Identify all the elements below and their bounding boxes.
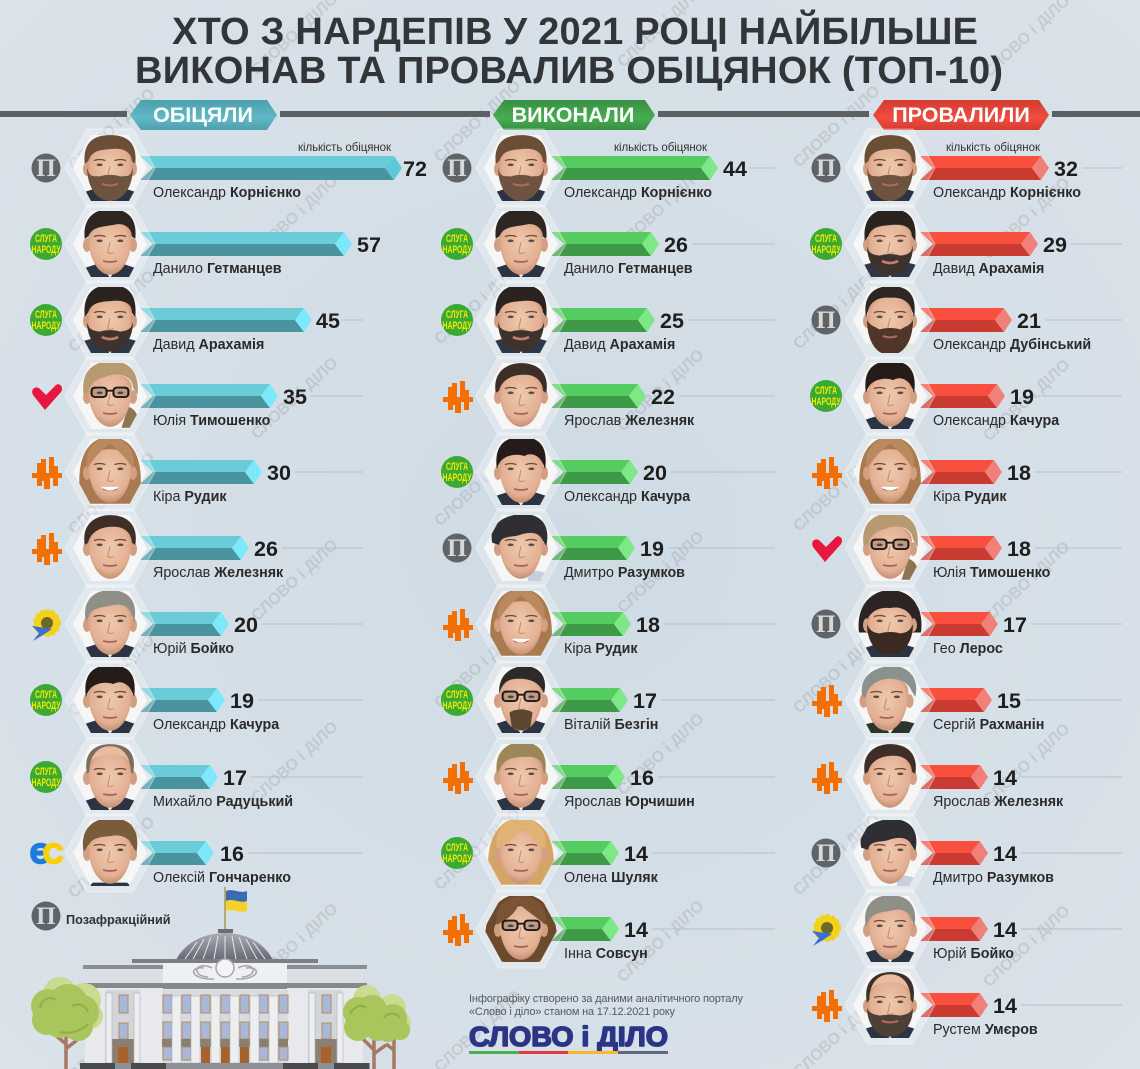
icon: Servant of the People xyxy=(30,761,62,793)
row: Разумков 14 xyxy=(812,814,1122,892)
icon: Holos xyxy=(443,762,473,794)
icon: Servant of the People: СЛУГА xyxy=(815,233,837,245)
icon: Servant of the People: НАРОДУ xyxy=(32,320,61,332)
icon: Servant of the People: НАРОДУ xyxy=(442,320,472,332)
icon: Batkivshchyna heart xyxy=(32,384,62,410)
portrait xyxy=(476,509,566,587)
icon: Servant of the People: НАРОДУ xyxy=(32,777,61,789)
bar 14 xyxy=(920,841,988,865)
portrait xyxy=(65,205,155,283)
icon: Servant of the People xyxy=(441,456,473,488)
row: Гетманцев 57 xyxy=(30,205,381,283)
name: Дмитро Разумков xyxy=(933,870,1054,886)
icon: Holos xyxy=(32,457,62,489)
row: Гончаренко 16 xyxy=(30,814,363,892)
row: Гетманцев 26 xyxy=(441,205,775,283)
icon: Holos xyxy=(812,990,842,1022)
portrait xyxy=(65,509,155,587)
icon: Batkivshchyna heart xyxy=(812,536,842,562)
portrait xyxy=(476,890,566,968)
value: 20 xyxy=(234,613,258,637)
value: 25 xyxy=(660,309,684,333)
name: Олександр Качура xyxy=(153,717,280,733)
title: ВИКОНАВ ТА ПРОВАЛИВ ОБІЦЯНОК (ТОП-10) xyxy=(135,50,1003,92)
name: Давид Арахамія xyxy=(933,261,1044,277)
value: 14 xyxy=(993,994,1017,1018)
watermark pattern: СЛОВО і ДІЛО xyxy=(614,711,707,799)
value: 44 xyxy=(723,157,747,181)
value: 32 xyxy=(1054,157,1078,181)
value: 16 xyxy=(220,842,244,866)
icon: Servant of the People: СЛУГА xyxy=(35,689,57,701)
watermark pattern: СЛОВО і ДІЛО xyxy=(248,901,341,989)
portrait xyxy=(476,661,566,739)
legend: independent deputy xyxy=(32,902,171,930)
portrait xyxy=(476,738,566,816)
row: Корнієнко 72 xyxy=(32,129,427,207)
icon: Servant of the People: СЛУГА xyxy=(35,309,57,321)
bar 29 xyxy=(920,232,1038,256)
bar 15 xyxy=(920,688,992,712)
watermark pattern: СЛОВО і ДІЛО xyxy=(980,357,1073,445)
watermark pattern: СЛОВО і ДІЛО xyxy=(980,175,1073,263)
watermark pattern: СЛОВО і ДІЛО xyxy=(431,806,524,894)
portrait xyxy=(65,814,155,892)
name: Олександр Качура xyxy=(564,489,691,505)
value: 18 xyxy=(1007,461,1031,485)
name: Олена Шуляк xyxy=(564,870,659,886)
value: 15 xyxy=(997,689,1021,713)
icon: independent: П xyxy=(816,840,836,867)
name: Давид Арахамія xyxy=(153,337,264,353)
portrait xyxy=(476,357,566,435)
icon: Servant of the People: НАРОДУ xyxy=(812,244,841,256)
name: Рустем Умєров xyxy=(933,1022,1038,1038)
watermark pattern: СЛОВО і ДІЛО xyxy=(65,814,158,902)
axis caption, column 2: кількість обіцянок xyxy=(614,142,708,154)
value: 20 xyxy=(643,461,667,485)
portrait xyxy=(845,509,935,587)
row: Умєров 14 xyxy=(812,966,1122,1044)
row: Лерос 17 xyxy=(812,585,1122,663)
portrait xyxy=(845,281,935,359)
watermark pattern: СЛОВО і ДІЛО xyxy=(980,721,1073,809)
icon: independent: П xyxy=(447,535,467,562)
bar 22 xyxy=(551,384,646,408)
watermark pattern: СЛОВО і ДІЛО xyxy=(980,539,1073,627)
value: 19 xyxy=(640,537,664,561)
portrait xyxy=(845,738,935,816)
icon: Servant of the People: НАРОДУ xyxy=(442,472,472,484)
name: Олександр Корнієнко xyxy=(153,185,301,201)
watermark pattern: СЛОВО і ДІЛО xyxy=(248,355,341,443)
row: Железняк 26 xyxy=(32,509,363,587)
bar 18 xyxy=(551,612,631,636)
row: Железняк 14 xyxy=(812,738,1122,816)
bar 30 xyxy=(140,460,262,484)
icon: independent: П xyxy=(36,155,56,182)
row: Качура 19 xyxy=(810,357,1122,435)
name: Кіра Рудик xyxy=(153,489,227,505)
bar 17 xyxy=(140,765,218,789)
row: Арахамія 25 xyxy=(441,281,775,359)
row: Тимошенко 35 xyxy=(32,357,363,435)
icon: independent xyxy=(812,610,840,638)
icon: Servant of the People xyxy=(30,228,62,260)
watermark pattern: СЛОВО і ДІЛО xyxy=(790,811,883,899)
watermark pattern: СЛОВО і ДІЛО xyxy=(614,529,707,617)
ribbon: Провалили: ПРОВАЛИЛИ xyxy=(892,103,1030,127)
row: Рудик 30 xyxy=(32,433,363,511)
row: Арахамія 29 xyxy=(810,205,1122,283)
icon: independent: П xyxy=(447,155,467,182)
value: 45 xyxy=(316,309,340,333)
icon: Servant of the People xyxy=(441,304,473,336)
portrait xyxy=(845,966,935,1044)
icon: Servant of the People: НАРОДУ xyxy=(442,853,472,865)
ribbon: Виконали xyxy=(493,100,655,130)
value: 26 xyxy=(254,537,278,561)
portrait xyxy=(65,281,155,359)
watermark pattern: СЛОВО і ДІЛО xyxy=(248,173,341,261)
illustration: Verkhovna Rada building xyxy=(80,887,370,1069)
row: Рудик 18 xyxy=(443,585,775,663)
portrait xyxy=(845,433,935,511)
portrait xyxy=(65,129,155,207)
watermark pattern: СЛОВО і ДІЛО xyxy=(248,719,341,807)
bar 19 xyxy=(920,384,1005,408)
bar 19 xyxy=(551,536,635,560)
portrait xyxy=(476,129,566,207)
icon: flag xyxy=(224,887,247,933)
name: Юрій Бойко xyxy=(153,641,234,657)
row: Корнієнко 44 xyxy=(442,129,775,207)
portrait xyxy=(65,661,155,739)
row: Радуцький 17 xyxy=(30,738,363,816)
icon: Servant of the People xyxy=(30,684,62,716)
name: Давид Арахамія xyxy=(564,337,675,353)
watermark pattern: СЛОВО і ДІЛО xyxy=(65,268,158,356)
value: 35 xyxy=(283,385,307,409)
bar 20 xyxy=(140,612,229,636)
row: Качура 19 xyxy=(30,661,363,739)
row: Тимошенко 18 xyxy=(812,509,1122,587)
name: Михайло Радуцький xyxy=(153,794,293,810)
bar 14 xyxy=(920,917,988,941)
icon: Servant of the People: СЛУГА xyxy=(35,766,57,778)
icon: independent xyxy=(812,154,840,182)
name: Гео Лерос xyxy=(933,641,1003,657)
portrait xyxy=(476,205,566,283)
row: Бойко 14 xyxy=(812,890,1122,968)
icon: Servant of the People xyxy=(810,380,842,412)
portrait xyxy=(845,661,935,739)
value: 14 xyxy=(993,918,1017,942)
icon: Servant of the People: СЛУГА xyxy=(446,461,468,473)
name: Ярослав Железняк xyxy=(153,565,284,581)
value: 18 xyxy=(636,613,660,637)
value: 17 xyxy=(633,689,657,713)
name: Юрій Бойко xyxy=(933,946,1014,962)
value: 19 xyxy=(230,689,254,713)
icon: Servant of the People: СЛУГА xyxy=(446,842,468,854)
watermark pattern: СЛОВО і ДІЛО xyxy=(614,165,707,253)
value: 18 xyxy=(1007,537,1031,561)
portrait xyxy=(476,281,566,359)
name: Олександр Качура xyxy=(933,413,1060,429)
name: Данило Гетманцев xyxy=(153,261,282,277)
bar 14 xyxy=(920,765,988,789)
icon: Servant of the People xyxy=(441,684,473,716)
icon: Servant of the People: СЛУГА xyxy=(35,233,57,245)
bar 17 xyxy=(551,688,628,712)
value: 72 xyxy=(403,157,427,181)
watermark pattern: СЛОВО і ДІЛО xyxy=(431,624,524,712)
value: 30 xyxy=(267,461,291,485)
name: Ярослав Железняк xyxy=(564,413,695,429)
bar 16 xyxy=(551,765,625,789)
value: 29 xyxy=(1043,233,1067,257)
icon: independent: П xyxy=(816,155,836,182)
icon: Holos xyxy=(812,457,842,489)
row: Рахманін 15 xyxy=(812,661,1122,739)
value: 14 xyxy=(624,842,648,866)
watermark pattern: СЛОВО і ДІЛО xyxy=(431,442,524,530)
portrait xyxy=(476,433,566,511)
bar 20 xyxy=(551,460,638,484)
bar 14 xyxy=(920,993,988,1017)
row: Бойко 20 xyxy=(32,585,363,663)
portrait xyxy=(845,129,935,207)
name: Ярослав Железняк xyxy=(933,794,1064,810)
bar 72 xyxy=(140,156,402,180)
row: Разумков 19 xyxy=(442,509,775,587)
portrait xyxy=(65,433,155,511)
row: Безгін 17 xyxy=(441,661,775,739)
icon: Servant of the People: СЛУГА xyxy=(446,309,468,321)
icon: Servant of the People xyxy=(810,228,842,260)
value: 26 xyxy=(664,233,688,257)
watermark pattern: СЛОВО і ДІЛО xyxy=(790,83,883,171)
value: 17 xyxy=(1003,613,1027,637)
logo: Слово і діло: СЛОВО і ДІЛО xyxy=(469,1021,668,1052)
illustration: left tree xyxy=(31,977,103,1069)
value: 14 xyxy=(624,918,648,942)
bar 26 xyxy=(140,536,249,560)
bar 35 xyxy=(140,384,278,408)
portrait xyxy=(845,814,935,892)
icon: Servant of the People: СЛУГА xyxy=(815,385,837,397)
name: Кіра Рудик xyxy=(564,641,638,657)
portrait xyxy=(65,585,155,663)
bar 14 xyxy=(551,917,619,941)
bar 21 xyxy=(920,308,1012,332)
name: Юлія Тимошенко xyxy=(933,565,1051,581)
row: Совсун 14 xyxy=(443,890,775,968)
name: Сергій Рахманін xyxy=(933,717,1044,733)
icon: Holos xyxy=(812,762,842,794)
icon: Holos xyxy=(812,685,842,717)
value: 14 xyxy=(993,766,1017,790)
portrait xyxy=(476,585,566,663)
icon: independent xyxy=(812,306,840,334)
row: Железняк 22 xyxy=(443,357,775,435)
row: Юрчишин 16 xyxy=(443,738,775,816)
icon: Holos xyxy=(443,914,473,946)
watermark pattern: СЛОВО і ДІЛО xyxy=(65,450,158,538)
panel: promised ranking xyxy=(30,129,427,892)
bar 16 xyxy=(140,841,214,865)
icon: Servant of the People: НАРОДУ xyxy=(442,700,472,712)
name: Олександр Дубінський xyxy=(933,337,1091,353)
bar 57 xyxy=(140,232,352,256)
ribbon: Обіцяли: ОБІЦЯЛИ xyxy=(153,103,253,127)
bar 32 xyxy=(920,156,1049,180)
watermark pattern: СЛОВО і ДІЛО xyxy=(65,86,158,174)
axis caption, column 3: кількість обіцянок xyxy=(946,142,1041,154)
bar 18 xyxy=(920,536,1002,560)
source note xyxy=(469,993,744,1018)
watermark pattern: СЛОВО і ДІЛО xyxy=(790,447,883,535)
portrait xyxy=(845,890,935,968)
icon: Servant of the People xyxy=(441,228,473,260)
watermark pattern: СЛОВО і ДІЛО xyxy=(790,265,883,353)
icon: Servant of the People: СЛУГА xyxy=(446,689,468,701)
portrait xyxy=(845,205,935,283)
icon: independent xyxy=(812,838,840,868)
panel: fulfilled ranking xyxy=(441,129,775,968)
name: Данило Гетманцев xyxy=(564,261,693,277)
ribbon: Обіцяли xyxy=(130,100,277,130)
name: Інна Совсун xyxy=(564,946,648,962)
icon: OPZZh sunflower xyxy=(812,915,840,946)
panel: failed ranking xyxy=(810,129,1122,1044)
axis caption, column 1: кількість обіцянок xyxy=(298,142,392,154)
row: Шуляк 14 xyxy=(441,814,775,892)
icon: European Solidarity xyxy=(30,838,63,869)
watermark pattern: СЛОВО і ДІЛО xyxy=(431,260,524,348)
name: Кіра Рудик xyxy=(933,489,1007,505)
name: Віталій Безгін xyxy=(564,717,658,733)
portrait xyxy=(845,585,935,663)
icon: Holos xyxy=(32,533,62,565)
icon: Servant of the People: НАРОДУ xyxy=(442,244,472,256)
value: 14 xyxy=(993,842,1017,866)
bar 14 xyxy=(551,841,619,865)
row: Арахамія 45 xyxy=(30,281,363,359)
value: 21 xyxy=(1017,309,1041,333)
icon: Servant of the People xyxy=(441,837,473,869)
watermark pattern: СЛОВО і ДІЛО xyxy=(980,903,1073,991)
title xyxy=(135,8,1003,92)
value: 16 xyxy=(630,766,654,790)
name: Олексій Гончаренко xyxy=(153,870,291,886)
name: Олександр Корнієнко xyxy=(933,185,1081,201)
icon: independent xyxy=(32,154,60,182)
portrait xyxy=(65,357,155,435)
icon: Holos xyxy=(443,609,473,641)
name: Ярослав Юрчишин xyxy=(564,794,695,810)
illustration: right trees xyxy=(343,985,411,1069)
watermark pattern: СЛОВО і ДІЛО xyxy=(614,898,707,986)
bar 17 xyxy=(920,612,998,636)
icon: Servant of the People: НАРОДУ xyxy=(812,396,841,408)
name: Юлія Тимошенко xyxy=(153,413,271,429)
icon: European Solidarity: Є xyxy=(30,838,50,869)
watermark pattern: СЛОВО і ДІЛО xyxy=(614,347,707,435)
portrait xyxy=(65,738,155,816)
watermark pattern: СЛОВО і ДІЛО xyxy=(248,537,341,625)
value: 19 xyxy=(1010,385,1034,409)
legend: independent deputy: Позафракційний xyxy=(66,913,171,927)
ribbon: Виконали: ВИКОНАЛИ xyxy=(512,103,634,127)
icon: OPZZh sunflower xyxy=(32,610,60,641)
value: 22 xyxy=(651,385,675,409)
row: Дубінський 21 xyxy=(812,281,1122,359)
watermark pattern: СЛОВО і ДІЛО xyxy=(431,78,524,166)
legend: independent deputy: П xyxy=(36,903,56,930)
title: ХТО З НАРДЕПІВ У 2021 РОЦІ НАЙБІЛЬШЕ xyxy=(172,8,978,53)
bar 19 xyxy=(140,688,225,712)
portrait xyxy=(845,357,935,435)
value: 57 xyxy=(357,233,381,257)
bar 45 xyxy=(140,308,312,332)
icon: Servant of the People: НАРОДУ xyxy=(32,700,61,712)
icon: independent xyxy=(442,534,472,562)
row: Качура 20 xyxy=(441,433,775,511)
row: Корнієнко 32 xyxy=(812,129,1122,207)
icon: European Solidarity: С xyxy=(43,838,63,869)
icon: Holos xyxy=(443,381,473,413)
portrait xyxy=(476,814,566,892)
icon: Servant of the People: СЛУГА xyxy=(446,233,468,245)
icon: independent: П xyxy=(816,307,836,334)
bar 26 xyxy=(551,232,659,256)
bar 18 xyxy=(920,460,1002,484)
name: Дмитро Разумков xyxy=(564,565,685,581)
icon: Servant of the People: НАРОДУ xyxy=(32,244,61,256)
source note: Інфографіку створено за даними аналітичного порталу xyxy=(469,993,744,1005)
icon: independent xyxy=(442,154,472,182)
icon: Servant of the People xyxy=(30,304,62,336)
ribbon: Провалили xyxy=(873,100,1049,130)
icon: independent: П xyxy=(816,611,836,638)
name: Олександр Корнієнко xyxy=(564,185,712,201)
watermark pattern: СЛОВО і ДІЛО xyxy=(790,629,883,717)
row: Рудик 18 xyxy=(812,433,1122,511)
watermark pattern: СЛОВО і ДІЛО xyxy=(65,632,158,720)
value: 17 xyxy=(223,766,247,790)
source note: «Слово і діло» станом на 17.12.2021 року xyxy=(469,1006,676,1018)
bar 44 xyxy=(551,156,718,180)
bar 25 xyxy=(551,308,655,332)
